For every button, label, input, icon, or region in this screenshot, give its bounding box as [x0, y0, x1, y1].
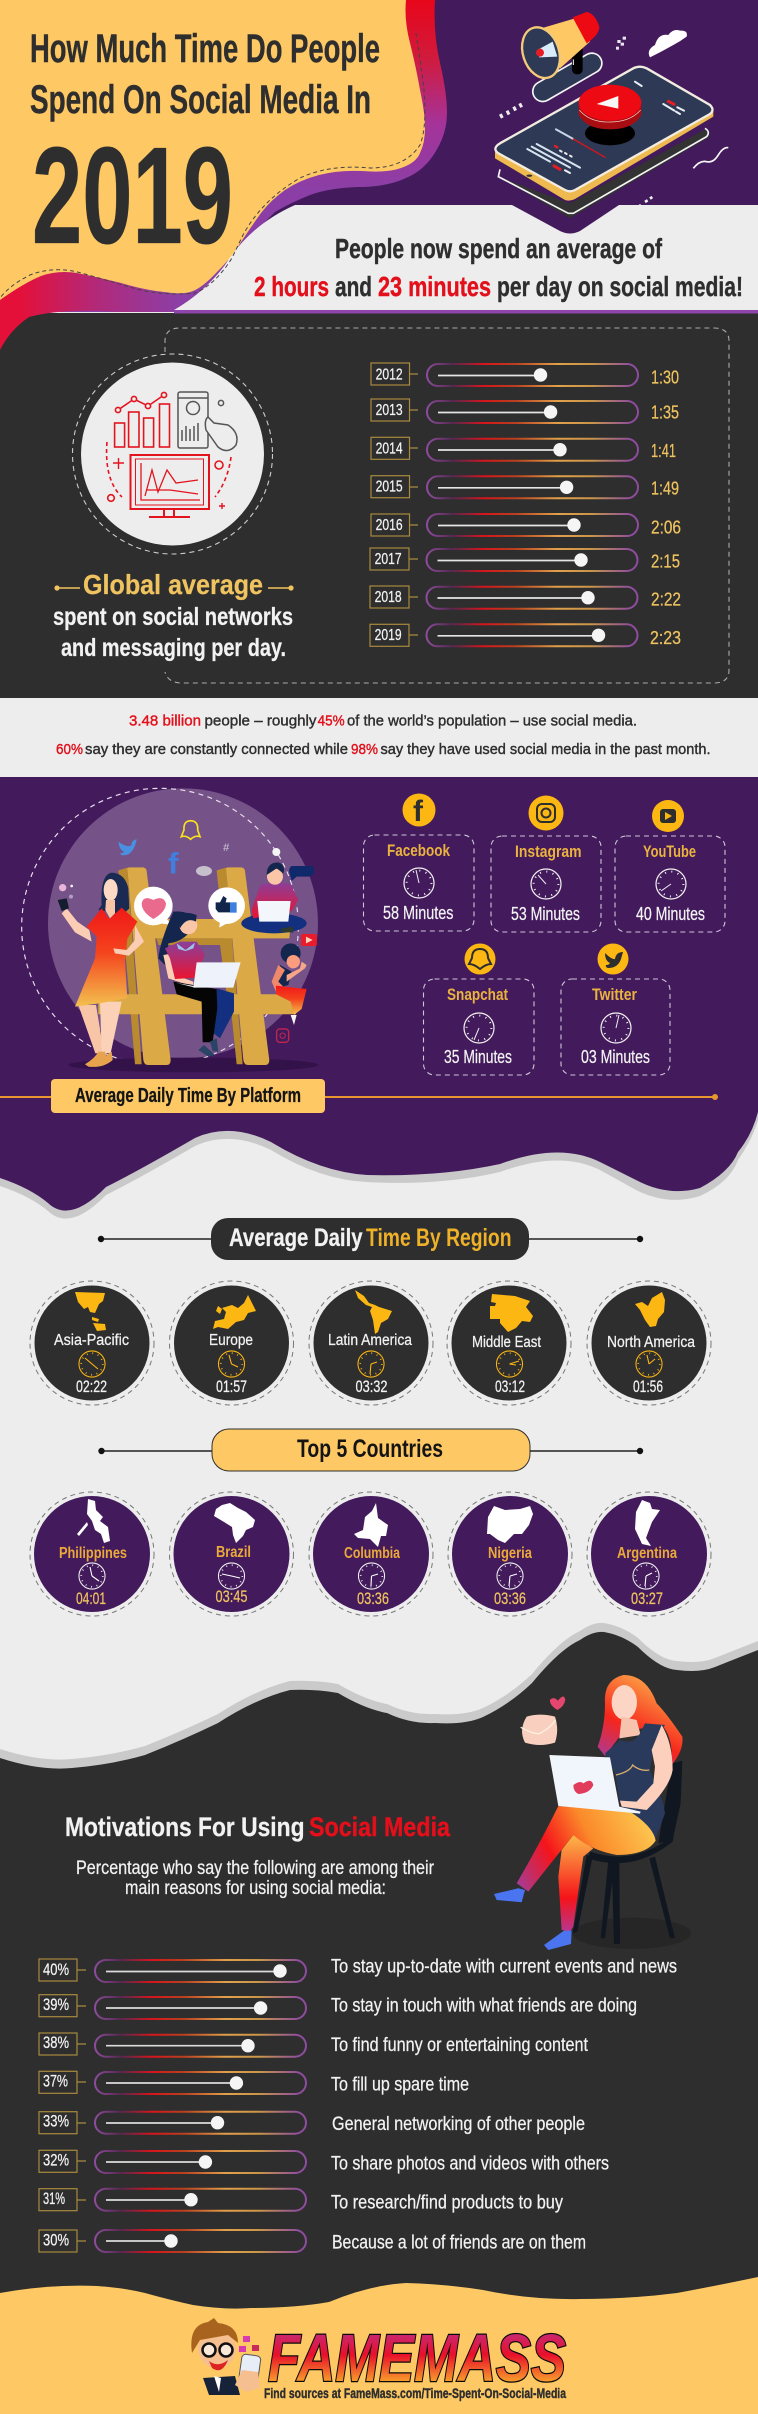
body: [605, 1723, 665, 1840]
country: Brazil: [170, 1492, 294, 1616]
callout background with notch: [174, 205, 758, 310]
country: Argentina: 03:27: [631, 1589, 663, 1608]
card: Facebook: f: [413, 795, 424, 828]
panel: population stats: people – roughly: [204, 713, 317, 730]
chart: yearly time sliders: 2012: [376, 366, 403, 383]
chart: motivations sliders: To research/find products to buy: [331, 2193, 563, 2214]
panel: motivations background: [0, 1623, 758, 2320]
text: spent on social networks: [53, 603, 293, 662]
region: North America: [587, 1281, 711, 1405]
region: Asia-Pacific: Asia-Pacific: [54, 1332, 129, 1349]
chart: motivations sliders: To find funny or entertaining content: [331, 2035, 589, 2056]
region: Europe: [170, 1281, 294, 1405]
callout text line 2: 2 hours: [254, 271, 329, 302]
card: Twitter: [561, 944, 670, 1075]
card: Facebook: 58 Minutes: [383, 903, 454, 923]
heading: motivations: Social Media: [309, 1812, 451, 1842]
chart: motivations sliders: 32%: [43, 2151, 69, 2170]
country: Philippines: Philippines: [59, 1545, 127, 1562]
icon: like bubble: [208, 887, 245, 928]
card: Snapchat: 35 Minutes: [444, 1047, 512, 1067]
country: Columbia: 03:36: [357, 1589, 389, 1608]
region: Middle East: 03:12: [495, 1377, 525, 1396]
country: Brazil: 03:45: [216, 1587, 248, 1606]
panel: footer: [0, 2277, 758, 2414]
chart: motivations sliders: 31%: [43, 2189, 65, 2208]
chart: yearly time sliders: 1:35: [651, 403, 679, 423]
panel: population stats: 60%: [56, 741, 83, 758]
callout text line 2: [254, 271, 743, 302]
heading: top 5 countries: Top 5 Countries: [297, 1435, 443, 1463]
panel: population stats: say they have used social media in the past month.: [380, 741, 710, 758]
chart: motivations sliders: 30%: [43, 2231, 69, 2250]
chart: yearly time sliders: [370, 363, 681, 648]
chart: motivations sliders: To share photos and videos with others: [331, 2153, 609, 2174]
panel: population stats: 45%: [318, 713, 345, 730]
chart: yearly time sliders: 2:06: [651, 517, 681, 537]
chart: motivations sliders: [39, 1957, 677, 2253]
card: Facebook: Facebook: [387, 841, 450, 860]
chart: yearly time sliders: 2013: [376, 402, 403, 419]
chart: motivations sliders: To stay up-to-date with current events and news: [331, 1957, 677, 1978]
seated woman: [158, 911, 241, 1057]
chart: yearly time sliders: 1:30: [651, 367, 679, 387]
panel: platform cards: [364, 794, 725, 1075]
chart: yearly time sliders: 2019: [375, 627, 402, 644]
floating social icons: [118, 821, 317, 1042]
country: Columbia: [309, 1492, 433, 1616]
panel: population stats: of the world’s population – use social media.: [347, 713, 637, 730]
panel: population stats: 98%: [351, 741, 378, 758]
country: Argentina: Argentina: [617, 1545, 677, 1562]
hair: [598, 1675, 683, 1765]
heading: time by region: Time By Region: [366, 1224, 512, 1252]
region: Europe: Europe: [209, 1332, 253, 1349]
chart: motivations sliders: To fill up spare time: [331, 2074, 469, 2095]
country: Philippines: 04:01: [76, 1589, 106, 1608]
chart: yearly time sliders: 2015: [376, 478, 403, 495]
chart: yearly time sliders: 2017: [375, 551, 402, 568]
man with laptop: [241, 848, 314, 933]
logo mascot: [191, 2318, 261, 2395]
region: Europe: 01:57: [216, 1377, 247, 1396]
chart: yearly time sliders: 2014: [376, 440, 403, 457]
chart: yearly time sliders: 2:22: [651, 589, 681, 609]
region: Latin America: [309, 1281, 433, 1405]
region: Middle East: Middle East: [472, 1334, 542, 1351]
chart: yearly time sliders: 1:41: [651, 441, 676, 461]
card: YouTube: YouTube: [643, 842, 696, 861]
region: Middle East: [447, 1281, 571, 1405]
callout text line 1: People now spend an average of: [335, 233, 663, 264]
banner: average daily time by platform: [0, 1079, 718, 1113]
region: Latin America: Latin America: [328, 1332, 412, 1349]
country: Argentina: [587, 1492, 711, 1616]
chair: [573, 1761, 682, 1944]
chart: yearly time sliders: 2:23: [650, 628, 681, 648]
chart: motivations sliders: 37%: [43, 2072, 68, 2091]
title line 2: Spend On Social Media In: [30, 78, 371, 122]
heading: motivations: Motivations For Using: [65, 1812, 304, 1842]
region: North America: 01:56: [633, 1377, 663, 1396]
floating social icons: #: [223, 842, 230, 854]
heading: time by region: Average Daily: [229, 1224, 363, 1252]
text: spent on social networks: spent on social networks: [53, 603, 293, 631]
panel: platform section background: [0, 777, 758, 1219]
panel: population stats: 3.48 billion: [129, 713, 201, 730]
region: Asia-Pacific: [30, 1281, 154, 1405]
card: Twitter: Twitter: [592, 985, 637, 1004]
country: Nigeria: 03:36: [494, 1589, 526, 1608]
region: Asia-Pacific: 02:22: [76, 1377, 107, 1396]
chart: yearly time sliders: 2:15: [651, 551, 680, 571]
source line: Find sources at FameMass.com/Time-Spent-On-Social-Media: [264, 2385, 566, 2401]
woman standing: [58, 873, 144, 1067]
panel: population stats: [0, 698, 758, 777]
illustration: people on hashtag: [22, 788, 318, 1072]
envelope and heart: [522, 1715, 557, 1745]
panel: global average: [53, 328, 729, 683]
card: YouTube: [615, 800, 725, 932]
country: Nigeria: Nigeria: [488, 1545, 532, 1562]
region: Latin America: 03:32: [356, 1377, 388, 1396]
callout text line 2: 23 minutes: [378, 271, 491, 302]
chart: yearly time sliders: 1:49: [651, 478, 679, 498]
text: motivations intro: main reasons for using social media:: [125, 1878, 386, 1899]
chart: motivations sliders: 38%: [43, 2033, 69, 2052]
chart: motivations sliders: Because a lot of friends are on them: [332, 2232, 586, 2253]
country: Philippines: [30, 1492, 154, 1616]
card: Instagram: [491, 796, 601, 932]
illustration: woman with laptop: [494, 1675, 691, 1950]
region: North America: North America: [607, 1334, 695, 1351]
text: motivations intro: [76, 1858, 435, 1899]
heading: global average: Global average: [83, 569, 263, 600]
country: Columbia: Columbia: [344, 1545, 400, 1562]
card: Facebook: [364, 794, 474, 931]
logo wordmark: FAMEMASS: [268, 2321, 566, 2396]
country: Nigeria: [448, 1492, 572, 1616]
panel: header: [0, 0, 758, 698]
card: Twitter: 03 Minutes: [581, 1047, 650, 1067]
card: Instagram: Instagram: [515, 842, 582, 861]
chart: motivations sliders: 40%: [43, 1960, 69, 1979]
chart: yearly time sliders: 2016: [376, 517, 403, 534]
card: Snapchat: Snapchat: [447, 985, 508, 1004]
panel: population stats: say they are constantly connected while: [85, 741, 348, 758]
chart: motivations sliders: To stay in touch with what friends are doing: [331, 1996, 637, 2017]
icon: heart bubble: [134, 887, 173, 925]
banner: average daily time by platform: Average Daily Time By Platform: [75, 1085, 301, 1107]
floating social icons: f: [168, 848, 179, 881]
callout text line 2: and: [335, 271, 372, 302]
country: Brazil: Brazil: [216, 1544, 251, 1561]
laptop: [549, 1755, 641, 1814]
text: motivations intro: Percentage who say the following are among their: [76, 1858, 435, 1879]
legs: [558, 1835, 593, 1932]
icon: phone and megaphone illustration: [495, 12, 728, 218]
title line 1: How Much Time Do People: [30, 27, 380, 71]
chart: motivations sliders: General networking of other people: [332, 2114, 585, 2135]
text: spent on social networks: and messaging per day.: [61, 634, 286, 662]
card: Instagram: 53 Minutes: [511, 904, 580, 924]
card: Snapchat: [424, 944, 534, 1075]
small girl with phone: [272, 943, 307, 1025]
card: YouTube: 40 Minutes: [636, 904, 705, 924]
heading: time by region: [98, 1218, 643, 1260]
chart: yearly time sliders: 2018: [375, 589, 402, 606]
title year: 2019: [32, 119, 233, 273]
chart: motivations sliders: 33%: [43, 2112, 69, 2131]
heading: top 5 countries: [98, 1429, 643, 1471]
header yellow wave: [0, 0, 425, 300]
chart: motivations sliders: 39%: [43, 1995, 69, 2014]
circle icon: analytics dashboard: [72, 354, 272, 554]
